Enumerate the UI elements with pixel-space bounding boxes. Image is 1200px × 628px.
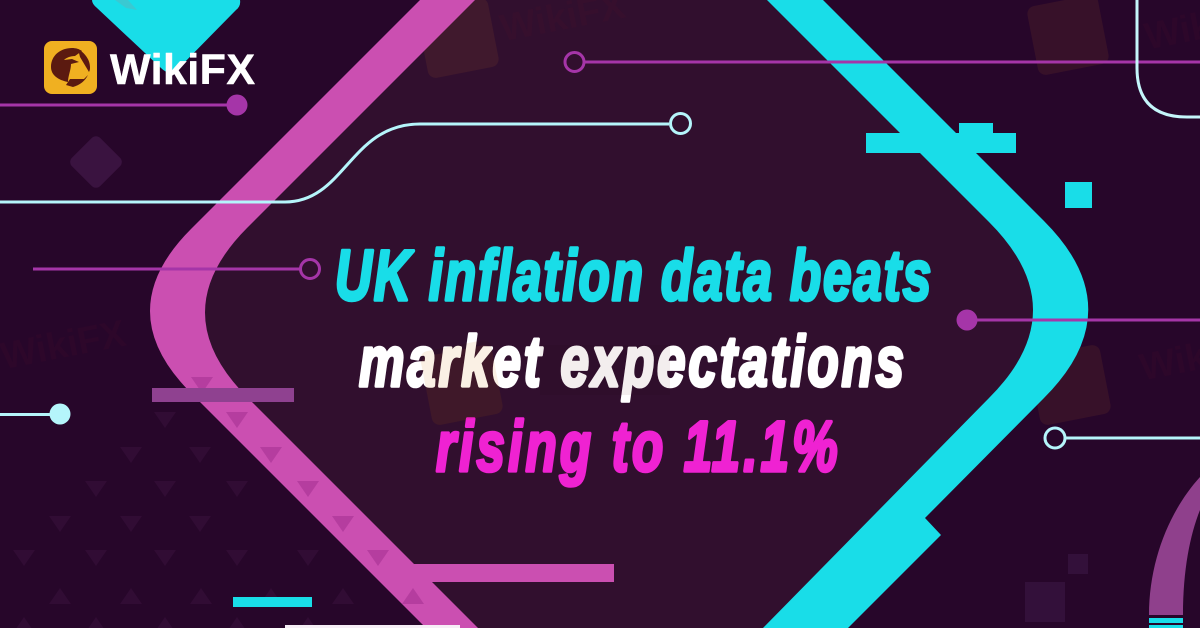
cyan bar bottom bbox=[233, 597, 312, 607]
cyan diamond band bbox=[763, 0, 1088, 628]
cyan square bbox=[1065, 182, 1092, 208]
purple dot connector right bbox=[956, 310, 1200, 330]
central diamond panel bbox=[176, 0, 1060, 628]
headline line 2: market expectations bbox=[359, 323, 904, 402]
watermark text bbox=[0, 0, 1200, 389]
purple connector top bbox=[565, 52, 1200, 72]
logo wordmark: WikiFX bbox=[110, 46, 255, 94]
logo bbox=[44, 41, 255, 94]
cyan top pointer bbox=[92, 0, 240, 72]
watermark tint over headline bbox=[419, 339, 670, 426]
magenta diamond band bbox=[150, 0, 614, 628]
faint diamond bbox=[68, 134, 124, 190]
watermark logos bbox=[416, 0, 1112, 426]
arc bottom right bbox=[1149, 477, 1200, 628]
light blue curved connector bbox=[0, 114, 690, 202]
headline line 3: rising to 11.1% bbox=[436, 408, 838, 487]
purple connector left bbox=[33, 260, 320, 278]
headline line 1: UK inflation data beats bbox=[335, 237, 931, 316]
faint triangle pattern bbox=[13, 412, 354, 628]
white bar bottom bbox=[285, 625, 460, 628]
purple connector top left bbox=[0, 94, 248, 116]
light blue dot connector bbox=[0, 404, 70, 424]
watermark text: WikiFX bbox=[0, 313, 130, 378]
light blue connector right bbox=[1045, 428, 1200, 448]
faint squares bbox=[1025, 554, 1088, 622]
translucent bar on magenta band bbox=[152, 388, 294, 402]
logo icon bbox=[44, 41, 97, 94]
light blue corner connector bbox=[1137, 0, 1200, 117]
headline bbox=[335, 237, 931, 487]
